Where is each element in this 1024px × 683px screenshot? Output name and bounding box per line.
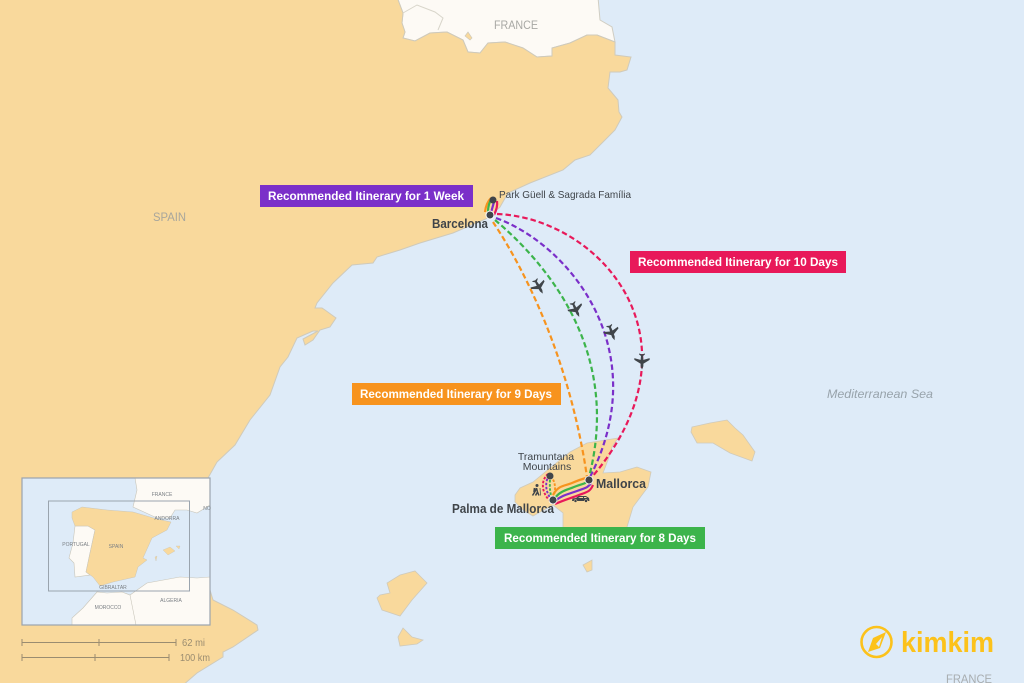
inset locator map: ANDORRA <box>154 516 180 522</box>
inset locator map: SPAIN <box>109 544 124 550</box>
marker: Tramuntana <box>546 472 554 480</box>
callout: 9 days: Recommended Itinerary for 9 Days <box>360 387 552 401</box>
plane icon: orange route <box>528 276 549 297</box>
place label: Tramuntana Mountains: Mountains <box>523 461 571 473</box>
inset locator map: ALGERIA <box>160 598 182 604</box>
marker: Barcelona <box>486 211 494 219</box>
icon: hiker <box>532 484 540 496</box>
marker: Palma <box>549 496 557 504</box>
Barcelona local routes <box>485 198 497 215</box>
logo: kimkim: kimkim <box>901 627 994 659</box>
island: Ibiza <box>377 571 427 616</box>
plane icon: purple route <box>602 322 622 343</box>
route: 8 days green <box>495 220 597 477</box>
callout: 10 days: Recommended Itinerary for 10 Days <box>638 255 838 269</box>
route: 10 days red <box>497 214 642 477</box>
route: 9 days orange <box>493 222 587 477</box>
marker: Park Guell <box>490 196 496 204</box>
callout: 8 days <box>495 527 705 549</box>
place label: Barcelona: Barcelona <box>432 217 489 231</box>
icon: car <box>572 496 590 502</box>
place label: Mallorca: Mallorca <box>596 477 647 491</box>
callout: 9 days <box>352 383 561 405</box>
scale bar: kilometres <box>22 652 210 664</box>
scale bar: miles <box>22 637 205 649</box>
inset locator map: GIBRALTAR <box>99 585 127 591</box>
scale bar: kilometres: 100 km <box>180 652 210 664</box>
scale bar: miles: 62 mi <box>182 637 205 649</box>
island: Formentera <box>398 628 423 646</box>
island: Cabrera <box>583 560 592 572</box>
land: Spain mainland <box>0 0 631 683</box>
country label: France: FRANCE <box>494 18 538 32</box>
inset locator map: NO <box>203 506 211 512</box>
inset locator map: FRANCE <box>152 492 173 498</box>
logo: kimkim <box>862 627 994 659</box>
place label: Tramuntana Mountains <box>518 451 574 473</box>
sea label: Mediterranean Sea <box>827 387 933 401</box>
plane icon: green route <box>565 299 586 320</box>
place label: Palma de Mallorca: Palma de Mallorca <box>452 502 555 516</box>
country label: Spain: SPAIN <box>153 210 186 224</box>
plane icon: red route <box>634 354 650 370</box>
callout: 10 days <box>630 251 846 273</box>
place label: Park Guell: Park Güell & Sagrada Família <box>499 189 631 201</box>
callout: 8 days: Recommended Itinerary for 8 Days <box>504 531 696 545</box>
island: Menorca <box>691 420 755 461</box>
Tramuntana dotted routes <box>543 474 555 500</box>
island: Mallorca <box>515 438 651 540</box>
Mallorca driving routes <box>553 478 593 504</box>
route: 1 week purple <box>496 218 613 477</box>
enclave and Andorra border <box>403 5 472 40</box>
land: France <box>397 0 615 57</box>
place label: Tramuntana Mountains: Tramuntana <box>518 451 574 463</box>
flight routes <box>493 214 642 477</box>
inset locator map <box>22 478 211 625</box>
inset locator map: PORTUGAL <box>62 542 90 548</box>
callout: 1 week: Recommended Itinerary for 1 Week <box>268 189 464 203</box>
inset locator map: MOROCCO <box>95 605 121 611</box>
callout: 1 week <box>260 185 473 207</box>
marker: Mallorca <box>585 476 593 484</box>
